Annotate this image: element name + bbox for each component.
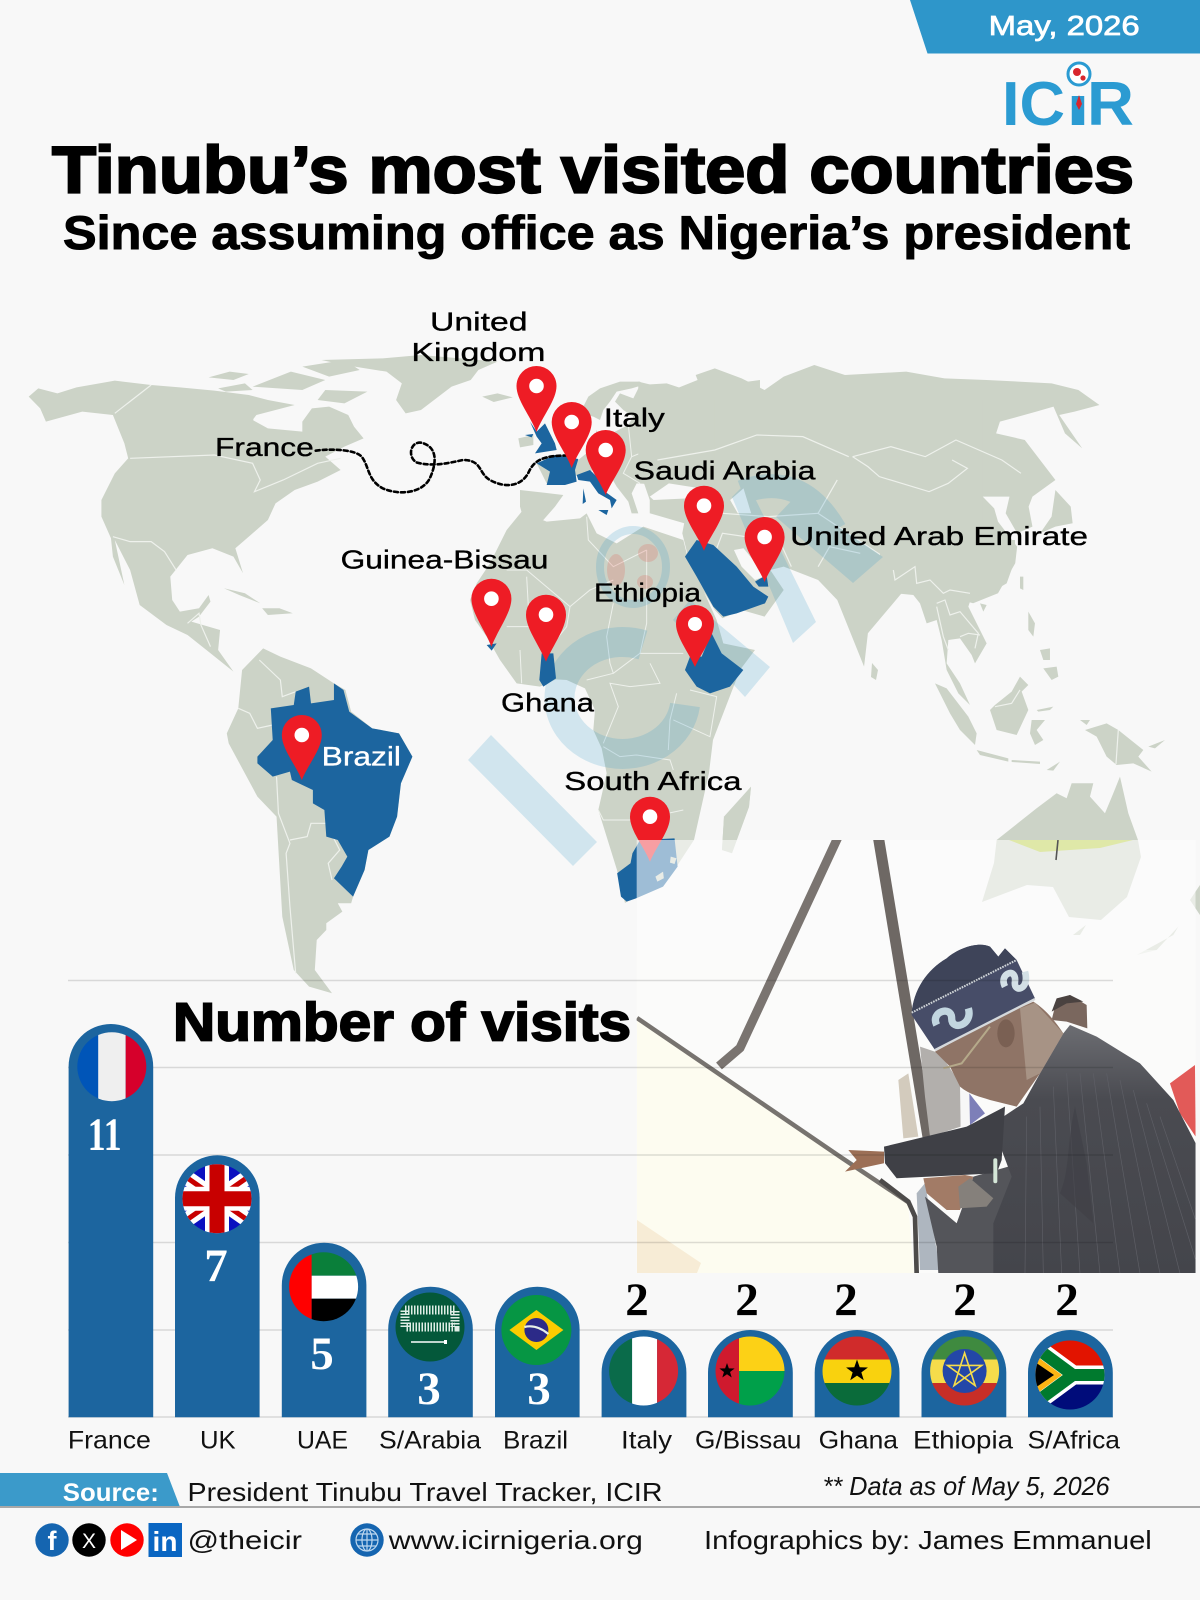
sleeve <box>884 1107 1005 1178</box>
country highlight: France <box>537 455 578 485</box>
flag: UAE <box>289 1252 362 1323</box>
pin: Italy <box>586 430 626 495</box>
icon: LinkedIn <box>148 1523 182 1557</box>
icon: Facebook: f <box>48 1526 58 1556</box>
value: Italy 2: 2 <box>625 1274 649 1326</box>
category labels: S/Arabia <box>379 1426 481 1454</box>
logo: ICIR <box>1002 63 1134 139</box>
world map <box>11 307 1200 993</box>
dotted route to France <box>316 443 570 492</box>
flag: Saudi Arabia <box>395 1292 465 1362</box>
icon: Facebook <box>35 1523 69 1557</box>
icon: LinkedIn: in <box>153 1526 177 1557</box>
value: South Africa 2: 2 <box>1055 1274 1079 1326</box>
country highlight: United Kingdom <box>525 422 557 453</box>
category labels: Brazil <box>503 1426 568 1454</box>
value: Ethiopia 2: 2 <box>953 1274 977 1326</box>
country highlight: Ghana <box>539 653 556 687</box>
credit: Infographics by: James Emmanuel <box>704 1525 1152 1555</box>
photo: President Tinubu boarding aircraft <box>637 835 1196 1273</box>
value: Brazil 3: 3 <box>527 1363 551 1415</box>
label: Ethiopia: Ethiopia <box>594 578 702 608</box>
website: www.icirnigeria.org <box>388 1525 643 1555</box>
pin: South Africa <box>630 797 670 862</box>
pin: France <box>552 402 592 468</box>
label: United Kingdom <box>411 307 545 367</box>
footer divider <box>0 1506 1200 1508</box>
person in grey suit <box>898 1047 985 1138</box>
icon: globe <box>350 1523 384 1557</box>
pin: Guinea-Bissau <box>471 579 511 647</box>
land: South America <box>227 648 412 993</box>
lapel pin <box>993 1158 997 1183</box>
label: South Africa: South Africa <box>564 766 742 796</box>
flag: France <box>77 1032 148 1102</box>
bar chart: number of visits <box>68 980 1120 1454</box>
flag: South Africa <box>1035 1340 1105 1410</box>
land: Southeast Asia and Oceania <box>880 540 1200 955</box>
label: France: France <box>215 432 314 462</box>
lower figure <box>916 1166 1012 1273</box>
source banner: Source: <box>63 1479 159 1507</box>
data note: ** Data as of May 5, 2026 <box>823 1471 1110 1501</box>
subtitle: Since assuming office as Nigeria’s president <box>63 206 1130 259</box>
category labels <box>68 1426 1120 1454</box>
pin: Brazil <box>282 715 322 780</box>
pin: Saudi Arabia <box>684 486 724 551</box>
land: Africa <box>470 512 755 903</box>
stair frame <box>637 835 928 1202</box>
aircraft door <box>637 1017 914 1273</box>
category labels: Ethiopia <box>913 1426 1013 1454</box>
pin: United Kingdom <box>516 366 556 432</box>
social handle: @theicir <box>188 1525 302 1555</box>
title: Tinubu’s most visited countries <box>52 132 1134 206</box>
face <box>935 1002 1063 1107</box>
man and bystanders <box>845 945 1196 1273</box>
label: Guinea-Bissau: Guinea-Bissau <box>341 544 548 574</box>
label: Brazil: Brazil <box>322 741 401 771</box>
icon: X <box>72 1523 106 1557</box>
category labels: France <box>68 1426 151 1454</box>
red-clad person <box>1170 1065 1196 1137</box>
label: Ghana: Ghana <box>501 688 595 718</box>
cap <box>912 945 1035 1050</box>
logo: ICIR: R <box>1087 70 1134 139</box>
label: United Arab Emirate: United Arab Emirate <box>790 521 1088 551</box>
label: United Kingdom: United <box>430 307 528 337</box>
pin: UAE <box>745 517 785 582</box>
robe <box>993 1025 1196 1273</box>
country highlight: UAE <box>755 575 768 587</box>
category labels: G/Bissau <box>695 1426 801 1454</box>
value: UK 7: 7 <box>204 1240 228 1292</box>
logo: ICIR: IC <box>1002 70 1065 139</box>
value: Saudi Arabia 3: 3 <box>417 1363 441 1415</box>
country highlight: Italy <box>577 470 617 515</box>
seas <box>650 483 768 580</box>
map pins <box>282 366 785 862</box>
value: Ghana 2: 2 <box>834 1274 858 1326</box>
flag: Guinea-Bissau <box>715 1336 785 1406</box>
source banner <box>0 1473 180 1507</box>
date banner <box>910 0 1200 54</box>
source text: President Tinubu Travel Tracker, ICIR <box>188 1477 662 1507</box>
map labels <box>215 307 1088 796</box>
country highlight: Saudi Arabia <box>685 540 768 617</box>
date banner: May, 2026 <box>989 10 1140 41</box>
flag: Italy <box>609 1336 679 1406</box>
icon: YouTube <box>110 1523 144 1557</box>
watermark: ICIR <box>468 482 883 866</box>
chart heading: Number of visits <box>173 993 631 1053</box>
land: Madagascar and Sri Lanka <box>722 663 878 853</box>
value: Guinea-Bissau 2: 2 <box>735 1274 759 1326</box>
bars <box>69 1024 1113 1417</box>
category labels: Ghana <box>819 1426 898 1454</box>
value: UAE 5: 5 <box>310 1328 334 1380</box>
label: Italy: Italy <box>604 403 665 433</box>
value: France 11: 11 <box>88 1109 122 1161</box>
country highlight: South Africa <box>617 838 678 902</box>
category labels: UAE <box>297 1426 348 1454</box>
label: Saudi Arabia: Saudi Arabia <box>634 455 816 485</box>
highlighted countries <box>487 422 768 902</box>
flag: UK <box>182 1164 252 1234</box>
country highlight: Ethiopia <box>685 633 743 693</box>
land: Europe <box>518 380 760 523</box>
hands <box>845 1150 993 1210</box>
land: Asia <box>638 365 1099 667</box>
icon: X: X <box>82 1530 96 1553</box>
pin: Ghana <box>526 595 566 662</box>
pin: Ethiopia <box>676 605 714 667</box>
person in background <box>1052 995 1087 1028</box>
category labels: Italy <box>621 1426 673 1454</box>
land: Americas and Greenland <box>11 355 513 672</box>
label: United Kingdom: Kingdom <box>411 337 545 367</box>
flag: Ghana <box>822 1336 892 1407</box>
category labels: UK <box>200 1426 236 1454</box>
flag: Ethiopia <box>930 1336 1000 1407</box>
Australia <box>982 777 1141 920</box>
logo: ICIR: I <box>1066 70 1090 139</box>
value labels <box>88 1109 1079 1415</box>
country highlight: Brazil <box>257 683 412 897</box>
category labels: S/Africa <box>1028 1426 1120 1454</box>
flag: Brazil <box>501 1295 571 1365</box>
country highlight: Guinea-Bissau <box>487 643 497 651</box>
social icons <box>35 1523 182 1557</box>
